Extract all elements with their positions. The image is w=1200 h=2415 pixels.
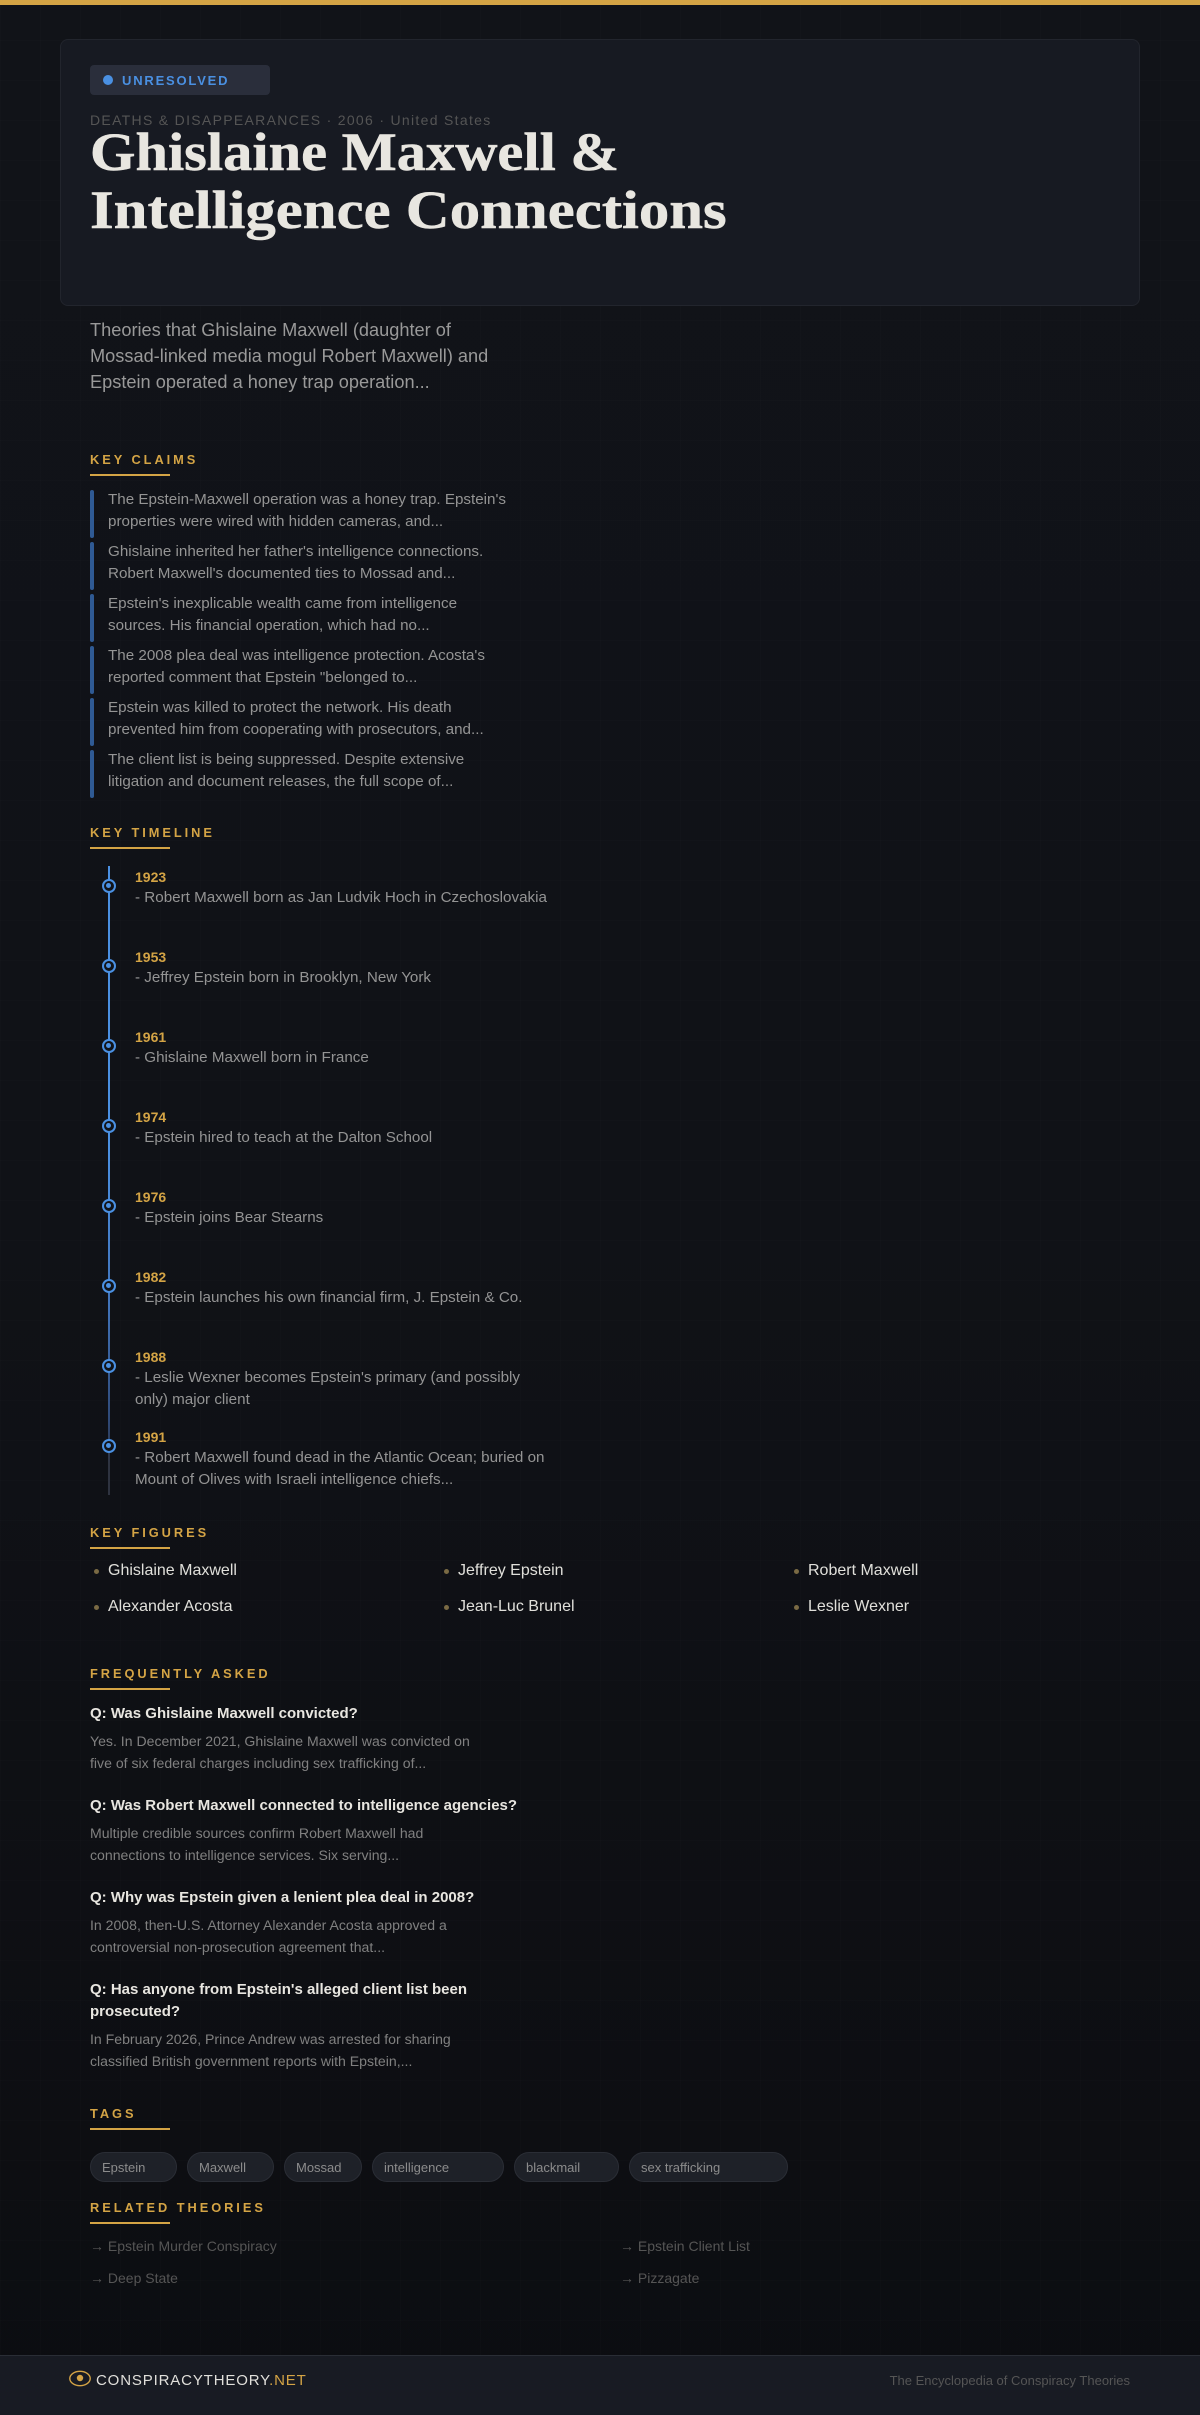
link: Epstein Client List: → Epstein Client List <box>620 2238 750 2254</box>
panel: key figures <box>90 1525 918 1615</box>
faq 4: Q: Has anyone from Epstein's alleged client list been <box>90 1981 467 1998</box>
claim 5 <box>90 698 484 746</box>
faq 4 <box>90 1981 467 2069</box>
panel: frequently asked <box>90 1666 517 2069</box>
event: 1982 <box>102 1269 522 1306</box>
claim 2: Ghislaine inherited her father's intelligence connections. <box>108 543 483 560</box>
faq 3 <box>90 1889 474 1955</box>
tag: intelligence <box>372 2152 504 2182</box>
claim 5: Epstein was killed to protect the network. His death <box>108 699 452 716</box>
figure: Jeffrey Epstein: Jeffrey Epstein <box>458 1562 564 1579</box>
faq 3: controversial non-prosecution agreement that... <box>90 1939 385 1955</box>
event: 1974 <box>102 1109 432 1146</box>
title: Intelligence Connections <box>90 180 727 240</box>
tag: blackmail <box>514 2152 619 2182</box>
faq 2: Q: Was Robert Maxwell connected to intelligence agencies? <box>90 1797 517 1814</box>
badge label: UNRESOLVED <box>122 72 229 88</box>
tag: Mossad: Mossad <box>296 2160 342 2175</box>
event: 1988: - Leslie Wexner becomes Epstein's primary (and possibly <box>135 1369 520 1386</box>
intro description: Epstein operated a honey trap operation... <box>90 372 430 392</box>
heading: tags: TAGS <box>90 2106 136 2121</box>
tag: sex trafficking: sex trafficking <box>641 2160 720 2175</box>
event: 1988: only) major client <box>135 1391 250 1408</box>
link: Deep State: → Deep State <box>90 2270 178 2286</box>
event: 1974: - Epstein hired to teach at the Dalton School <box>135 1129 432 1146</box>
event: 1991: Mount of Olives with Israeli intelligence chiefs... <box>135 1471 453 1488</box>
figure: Robert Maxwell: Robert Maxwell <box>808 1562 918 1579</box>
claim 3: Epstein's inexplicable wealth came from intelligence <box>108 595 457 612</box>
faq 2: connections to intelligence services. Six serving... <box>90 1847 399 1863</box>
tag: sex trafficking <box>629 2152 788 2182</box>
top accent bar <box>0 0 1200 5</box>
heading: key claims: KEY CLAIMS <box>90 452 198 467</box>
tag: Maxwell: Maxwell <box>199 2160 246 2175</box>
link: Pizzagate: → Pizzagate <box>620 2270 699 2286</box>
event: 1982: - Epstein launches his own financial firm, J. Epstein & Co. <box>135 1289 522 1306</box>
claim 6: The client list is being suppressed. Despite extensive <box>108 751 464 768</box>
claim 4: reported comment that Epstein "belonged to... <box>108 669 417 686</box>
figure: Leslie Wexner: Leslie Wexner <box>808 1598 909 1615</box>
event: 1953 <box>102 949 431 986</box>
figure: Jean-Luc Brunel: Jean-Luc Brunel <box>458 1598 575 1615</box>
event: 1976 <box>102 1189 323 1226</box>
title <box>90 122 727 240</box>
event: 1923: - Robert Maxwell born as Jan Ludvik Hoch in Czechoslovakia <box>135 889 547 906</box>
footer <box>0 2355 1200 2415</box>
claim 6: litigation and document releases, the full scope of... <box>108 773 453 790</box>
faq 4: classified British government reports with Epstein,... <box>90 2053 412 2069</box>
event: 1961: 1961 <box>135 1029 166 1045</box>
claim 6 <box>90 750 464 798</box>
faq 3: In 2008, then-U.S. Attorney Alexander Acosta approved a <box>90 1917 447 1933</box>
event: 1991: - Robert Maxwell found dead in the Atlantic Ocean; buried on <box>135 1449 544 1466</box>
event: 1953: 1953 <box>135 949 166 965</box>
intro description <box>90 320 488 392</box>
figure: Alexander Acosta: Alexander Acosta <box>108 1598 233 1615</box>
category and date meta line: DEATHS & DISAPPEARANCES · 2006 · United States <box>90 112 492 128</box>
faq 4: prosecuted? <box>90 2003 180 2020</box>
tag: intelligence: intelligence <box>384 2160 449 2175</box>
timeline spine <box>108 866 110 1495</box>
heading: key figures: KEY FIGURES <box>90 1525 209 1540</box>
claim 4 <box>90 646 485 694</box>
claim 1: properties were wired with hidden cameras, and... <box>108 513 443 530</box>
claim 4: The 2008 plea deal was intelligence protection. Acosta's <box>108 647 485 664</box>
faq 2: Multiple credible sources confirm Robert Maxwell had <box>90 1825 423 1841</box>
tag: Mossad <box>284 2152 362 2182</box>
panel: tags <box>90 2106 788 2182</box>
event: 1923: 1923 <box>135 869 166 885</box>
event: 1982: 1982 <box>135 1269 166 1285</box>
claim 2 <box>90 542 483 590</box>
panel: related theories <box>90 2200 750 2286</box>
intro description: Theories that Ghislaine Maxwell (daughter of <box>90 320 451 340</box>
event: 1976: - Epstein joins Bear Stearns <box>135 1209 323 1226</box>
faq 1 <box>90 1705 470 1771</box>
claim 3 <box>90 594 457 642</box>
event: 1923 <box>102 869 547 906</box>
link: Epstein Murder Conspiracy: → Epstein Murder Conspiracy <box>90 2238 277 2254</box>
icon: status dot <box>103 75 113 85</box>
event: 1953: - Jeffrey Epstein born in Brooklyn, New York <box>135 969 431 986</box>
tag: Epstein <box>90 2152 177 2182</box>
faq 3: Q: Why was Epstein given a lenient plea deal in 2008? <box>90 1889 474 1906</box>
event: 1988: 1988 <box>135 1349 166 1365</box>
claim 2: Robert Maxwell's documented ties to Mossad and... <box>108 565 455 582</box>
event: 1991 <box>102 1429 544 1488</box>
event: 1961 <box>102 1029 369 1066</box>
claim 3: sources. His financial operation, which had no... <box>108 617 430 634</box>
panel: key timeline <box>90 825 547 1495</box>
title: Ghislaine Maxwell & <box>90 122 619 182</box>
faq 1: Yes. In December 2021, Ghislaine Maxwell was convicted on <box>90 1733 470 1749</box>
tag: Maxwell <box>187 2152 274 2182</box>
figure: Ghislaine Maxwell: Ghislaine Maxwell <box>108 1562 237 1579</box>
faq 1: Q: Was Ghislaine Maxwell convicted? <box>90 1705 358 1722</box>
panel: hero header card <box>60 39 1140 306</box>
event: 1974: 1974 <box>135 1109 166 1125</box>
claim 5: prevented him from cooperating with prosecutors, and... <box>108 721 484 738</box>
logo wordmark: CONSPIRACYTHEORY.NET <box>96 2372 307 2389</box>
faq 2 <box>90 1797 517 1863</box>
claim 1 <box>90 490 506 538</box>
event: 1991: 1991 <box>135 1429 166 1445</box>
heading: key timeline: KEY TIMELINE <box>90 825 215 840</box>
heading: frequently asked: FREQUENTLY ASKED <box>90 1666 271 1681</box>
footer tagline: The Encyclopedia of Conspiracy Theories <box>890 2373 1130 2388</box>
event: 1988 <box>102 1349 520 1408</box>
tag: Epstein: Epstein <box>102 2160 145 2175</box>
panel: key claims <box>90 452 506 798</box>
faq 1: five of six federal charges including sex trafficking of... <box>90 1755 426 1771</box>
icon: eye logo <box>69 2370 91 2386</box>
heading: related theories: RELATED THEORIES <box>90 2200 266 2215</box>
event: 1961: - Ghislaine Maxwell born in France <box>135 1049 369 1066</box>
claim 1: The Epstein-Maxwell operation was a honey trap. Epstein's <box>108 491 506 508</box>
status badge: unresolved <box>90 65 270 95</box>
intro description: Mossad-linked media mogul Robert Maxwell) and <box>90 346 488 366</box>
event: 1976: 1976 <box>135 1189 166 1205</box>
tag: blackmail: blackmail <box>526 2160 580 2175</box>
faq 4: In February 2026, Prince Andrew was arrested for sharing <box>90 2031 451 2047</box>
